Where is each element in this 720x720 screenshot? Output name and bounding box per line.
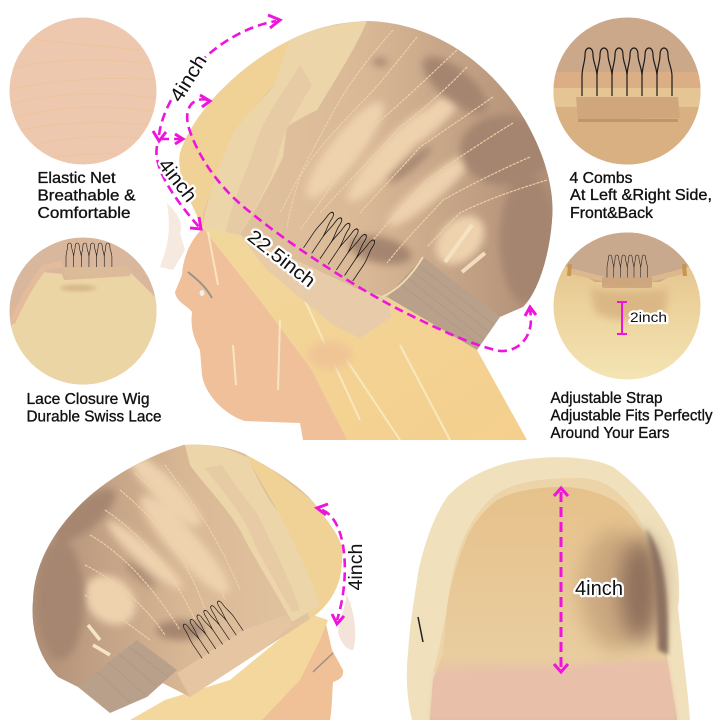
text: combs caption: Front&Back	[570, 205, 654, 222]
lace area	[9, 272, 158, 386]
text: lace closure caption: Durable Swiss Lace	[26, 408, 162, 426]
arrow: bottom left 4 inch	[317, 504, 345, 624]
face	[250, 620, 343, 720]
soft shadow	[60, 285, 96, 291]
text: combs caption	[570, 170, 712, 222]
comb	[66, 243, 112, 267]
label: 22.5inch: 22.5inch	[243, 226, 319, 292]
text: strap caption	[550, 390, 712, 442]
eye white	[200, 290, 204, 296]
panel: bottom right closure view	[407, 457, 690, 720]
strap seam	[382, 257, 423, 297]
stitch lines	[280, 30, 547, 263]
lower lace	[430, 660, 677, 720]
lace band tone	[205, 465, 300, 612]
hair	[130, 614, 328, 720]
dark edge	[645, 528, 668, 655]
panel: four combs circle	[553, 17, 701, 166]
comb	[607, 255, 648, 278]
cap top	[565, 232, 689, 282]
strap ribs	[97, 646, 168, 702]
darker band	[554, 72, 700, 88]
closure area	[430, 487, 677, 720]
strap ribs	[399, 264, 494, 345]
arrow: lower 4 inch	[156, 146, 201, 229]
comb	[181, 599, 243, 658]
comb tab	[576, 97, 680, 120]
lace band	[433, 478, 668, 672]
text: combs caption: 4 Combs	[570, 170, 632, 187]
lower lace strip	[240, 235, 392, 338]
adjustable strap	[387, 257, 500, 350]
outer cap and hair	[407, 457, 690, 720]
mid shadow	[580, 530, 650, 650]
arrow: top 4 inch	[153, 15, 280, 141]
text: strap caption: Around Your Ears	[550, 425, 670, 442]
lace flap	[338, 595, 355, 650]
mannequin face	[175, 228, 350, 440]
label: center 4inch: 4inch	[575, 578, 623, 600]
highlight streaks near strap	[445, 225, 485, 272]
hair	[203, 228, 527, 440]
panel: lace closure circle	[9, 237, 158, 386]
blonde front	[179, 40, 289, 228]
text: strap caption: Adjustable Strap	[550, 390, 663, 407]
strap	[553, 88, 701, 107]
arrow: 22.5 inch circumference	[187, 95, 536, 351]
eye	[188, 272, 212, 298]
cap base	[179, 21, 552, 317]
lower mesh	[553, 105, 701, 166]
stitch lines	[85, 465, 240, 640]
tab shadow	[578, 119, 678, 122]
text: lace closure caption	[26, 391, 162, 426]
lace tab	[602, 277, 652, 288]
lace flap	[160, 203, 185, 270]
strap buckles	[569, 264, 685, 276]
elastic net stitch lines	[10, 38, 157, 158]
panel: adjustable strap circle	[553, 232, 701, 380]
label: 2inch: 2inch	[630, 309, 667, 325]
text: elastic net caption: Comfortable	[38, 205, 131, 222]
panel: main wig side view	[160, 15, 560, 440]
eye	[313, 653, 333, 672]
panel: elastic net circle	[9, 17, 157, 165]
arrow: center 4 inch	[554, 488, 568, 672]
hair front shade	[590, 288, 668, 320]
text: strap caption: Adjustable Fits Perfectly	[550, 408, 712, 425]
text: elastic net caption	[38, 170, 136, 222]
text: lace closure caption: Lace Closure Wig	[26, 391, 150, 408]
comb	[582, 48, 672, 96]
text: combs caption: At Left &Right Side,	[570, 187, 712, 204]
shadow patches	[36, 480, 204, 660]
lace band inner tone	[226, 65, 312, 235]
strap	[78, 640, 177, 713]
comb edge	[418, 617, 423, 642]
highlights	[88, 625, 110, 655]
text: elastic net caption: Breathable &	[38, 188, 136, 204]
lace seam	[12, 264, 62, 323]
label: lower 4inch: 4inch	[153, 155, 201, 207]
label: vertical 4inch: 4inch	[345, 544, 367, 590]
blonde front	[245, 454, 342, 619]
hair strands	[208, 232, 450, 440]
label: top 4inch: 4inch	[166, 51, 212, 106]
marker: 2 inch	[617, 302, 667, 334]
cap base	[32, 444, 342, 697]
cap shadow patches	[346, 47, 556, 305]
comb	[304, 210, 378, 281]
closure tab	[66, 272, 131, 280]
lower lace strip	[177, 615, 292, 697]
strap	[570, 268, 685, 282]
hair shade	[308, 341, 352, 369]
dark shadow	[620, 538, 660, 642]
panel: bottom left wig view	[25, 440, 355, 720]
lace band	[185, 444, 320, 622]
arrow: short horizontal	[160, 134, 183, 144]
text: elastic net caption: Elastic Net	[38, 170, 116, 187]
lace band	[203, 21, 367, 235]
cap light streaks	[306, 95, 488, 268]
light streaks	[83, 458, 230, 628]
